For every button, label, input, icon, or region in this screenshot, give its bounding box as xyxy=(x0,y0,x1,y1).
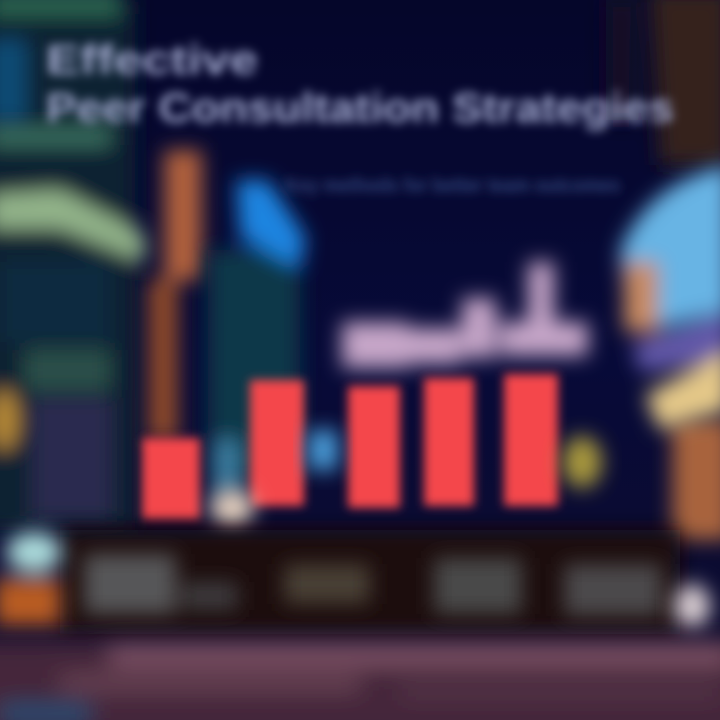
right white glow xyxy=(674,584,710,628)
person at right xyxy=(620,165,720,430)
bars xyxy=(142,374,558,520)
right top dark structure xyxy=(606,0,720,540)
left building xyxy=(0,0,145,530)
bottom stat blocks xyxy=(84,554,662,616)
white glow xyxy=(210,488,254,528)
bar chart xyxy=(142,262,602,528)
title: Effective xyxy=(46,36,258,83)
bar labels xyxy=(342,262,588,368)
teal tower xyxy=(208,180,306,500)
bottom dark band xyxy=(60,530,680,634)
blue connector xyxy=(308,430,338,470)
orange tower xyxy=(148,150,202,440)
title xyxy=(46,36,674,131)
street xyxy=(0,640,720,720)
yellow accent xyxy=(562,436,602,488)
left lower orange device xyxy=(0,532,62,626)
subtitle: Key methods for better team outcomes xyxy=(285,175,620,197)
title: Peer Consultation Strategies xyxy=(46,84,674,131)
